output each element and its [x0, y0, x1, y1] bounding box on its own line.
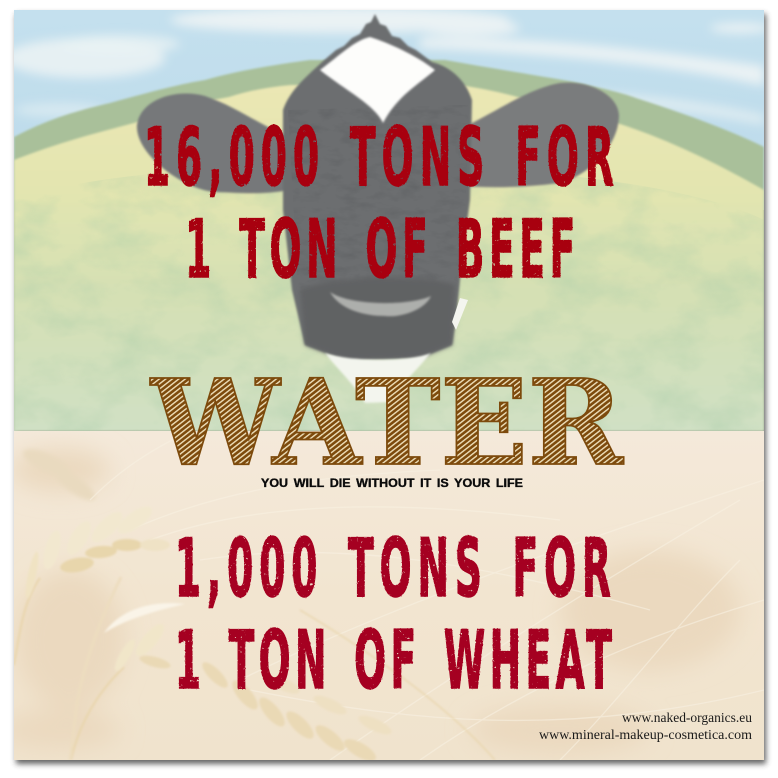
neck: [325, 353, 431, 403]
website credits: www.naked-organics.eu: [622, 711, 752, 726]
clouds: [5, 7, 770, 125]
tagline: YOU WILL DIE WITHOUT IT IS YOUR LIFE: [261, 478, 523, 490]
tree line: [14, 60, 764, 431]
wheat ear centre: [116, 655, 390, 760]
grass mottling: [14, 165, 764, 431]
panel: cow in field: [5, 7, 770, 431]
website credits: [539, 711, 752, 743]
field: [14, 85, 764, 431]
sky: [14, 10, 764, 210]
head: [283, 14, 472, 360]
blurred back ear: [24, 450, 95, 500]
wheat background: [14, 431, 764, 760]
title: WATER: WATER: [149, 353, 624, 492]
wheat ear left: [28, 525, 170, 586]
white cheek patch: [452, 298, 468, 330]
ears: [137, 94, 290, 193]
blaze: [320, 37, 435, 123]
soft shadows: [0, 448, 740, 755]
muzzle: [300, 278, 455, 360]
heading: 1 ton of beef: 1 TON OF BEEF: [185, 203, 575, 296]
light awns: [90, 475, 764, 760]
cow: [137, 14, 619, 403]
fur texture: [413, 186, 416, 188]
wheat stems: [14, 577, 495, 760]
pale leaf: [104, 603, 185, 633]
heading: 1,000 tons for: 1,000 TONS FOR: [175, 522, 611, 615]
website credits: www.mineral-makeup-cosmetica.com: [539, 728, 752, 743]
heading: 16,000 tons for: 16,000 TONS FOR: [144, 111, 614, 204]
panel: wheat: [0, 431, 764, 765]
heading: 1 ton of wheat: 1 TON OF WHEAT: [175, 614, 612, 707]
muzzle highlight: [330, 292, 431, 316]
